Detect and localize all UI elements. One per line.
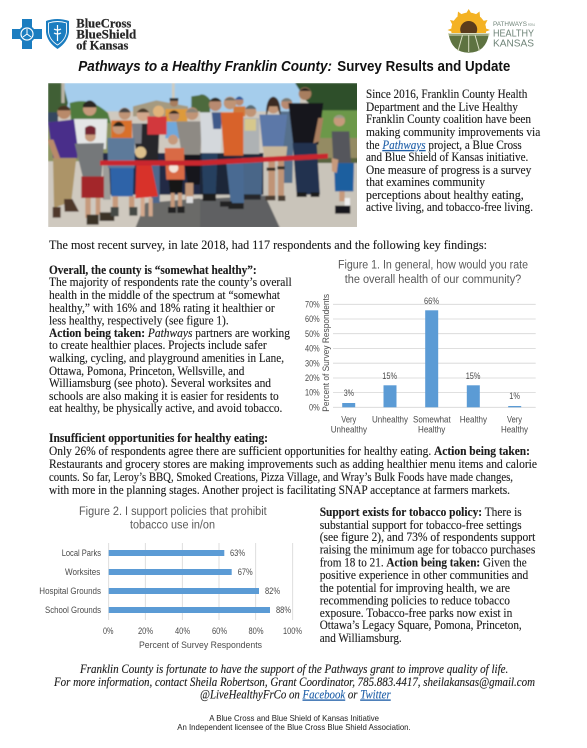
chart: figure 2 tobacco policy support <box>39 506 302 650</box>
text block: healthy eating finding: Only 26% of respondents agree there are sufficient opportunities for healthy eating. Action being taken: <box>49 444 530 458</box>
text block: introduction: Since 2016, Franklin County Health <box>366 87 527 101</box>
y axis labels: 20% <box>305 373 320 383</box>
y axis labels: 0% <box>309 402 320 412</box>
icon: blue cross <box>12 19 42 49</box>
text block: introduction: that examines community <box>366 175 486 189</box>
text block: closing and contact information: Franklin County is fortunate to have the support of the Pathways grant to improve quality of life. <box>79 662 508 676</box>
text block: overall health finding: health in the middle of the spectrum at “somewhat <box>49 288 281 302</box>
category labels <box>39 548 102 615</box>
text block: overall health finding: The majority of respondents rate the county’s overall <box>49 275 292 289</box>
photo: red ribbon <box>100 154 328 166</box>
chart title: tobacco use in/on <box>130 520 215 532</box>
logo wordmark: FOR A <box>528 23 535 27</box>
data labels <box>344 296 520 401</box>
y axis labels: Percent of Survey Respondents <box>321 293 331 412</box>
category labels: Healthy <box>501 424 529 434</box>
x axis labels: 0% <box>103 626 114 636</box>
bars <box>109 550 270 613</box>
logo wordmark: BlueShield <box>76 28 136 42</box>
data labels: 63% <box>230 548 245 558</box>
category labels: Unhealthy <box>372 414 409 424</box>
data labels: 82% <box>265 586 280 596</box>
icon: blue shield <box>46 19 69 49</box>
text block: overall health finding: eat healthy, be physically active, and avoid tobacco. <box>49 401 282 415</box>
y axis labels: 50% <box>305 329 320 339</box>
category labels: Somewhat <box>413 414 451 424</box>
category labels: Healthy <box>460 414 488 424</box>
chart title: Figure 1. In general, how would you rate <box>338 260 528 272</box>
text block: healthy eating finding: Restaurants and grocery stores are making improvements such as adding healthier menu items and calorie <box>49 457 537 471</box>
text block: introduction: the Pathways project, a Blue Cross <box>366 138 522 152</box>
photo: ribbon cutting group <box>47 83 360 228</box>
x axis labels <box>103 626 302 650</box>
category labels: Unhealthy <box>331 424 368 434</box>
data labels: 88% <box>276 605 291 615</box>
text block: introduction: Franklin County coalition have been <box>366 112 531 126</box>
logo wordmark: of Kansas <box>76 38 128 52</box>
y axis labels: 30% <box>305 358 320 368</box>
logo: Blue Cross Blue Shield of Kansas <box>12 16 136 52</box>
text: survey summary sentence: The most recent survey, in late 2018, had 117 respondents and the following key findings: <box>49 238 487 252</box>
y axis labels: 70% <box>305 300 320 310</box>
text block: tobacco policy finding: positive experience in other communities and <box>320 568 528 582</box>
text block: healthy eating finding: Insufficient opportunities for healthy eating: <box>49 431 268 445</box>
text block: closing and contact information: @LiveHealthyFrCo on Facebook or Twitter <box>200 688 391 702</box>
category labels <box>331 414 529 434</box>
logo wordmark: BlueCross <box>76 16 131 30</box>
text block: healthy eating finding: counts. So far, Leroy’s BBQ, Smoked Creations, Pizza Village, and Wray’s Bulk Foods have made changes, <box>49 470 513 484</box>
footer: licensee notice: A Blue Cross and Blue Shield of Kansas Initiative <box>209 713 379 723</box>
text block: introduction: Department and the Live Healthy <box>366 100 519 114</box>
text block: overall health finding: Williamsburg (see photo). Several worksites and <box>49 376 271 390</box>
chart title: Figure 2. I support policies that prohibit <box>79 506 267 518</box>
text block: overall health finding: Overall, the county is “somewhat healthy”: <box>49 263 257 277</box>
data labels: 15% <box>382 371 397 381</box>
y axis labels: 10% <box>305 388 320 398</box>
category labels: School Grounds <box>45 605 102 615</box>
text block: tobacco policy finding: Support exists for tobacco policy: There is <box>320 505 522 519</box>
text block: overall health finding: healthy,” with 16% and 18% rating it healthier or <box>49 301 275 315</box>
text block: overall health finding: walking, cycling, and playground amenities in Lane, <box>49 351 284 365</box>
text block: introduction: active living, and tobacco-free living. <box>366 200 533 214</box>
title: subtitle part: Survey Results and Update <box>337 59 510 75</box>
x axis labels: 80% <box>248 626 264 636</box>
text block: tobacco policy finding: exposure. Tobacco-free parks now exist in <box>320 606 512 620</box>
footer: licensee notice: An Independent licensee of the Blue Cross Blue Shield Association. <box>177 722 411 732</box>
text block: introduction: and Blue Shield of Kansas initiative. <box>366 150 528 164</box>
chart: figure 1 overall health ratings <box>305 260 536 434</box>
title: Pathways to a Healthy Franklin County: <box>78 59 332 75</box>
text block: introduction <box>366 87 541 214</box>
text block: overall health finding <box>49 263 292 415</box>
x axis labels: Percent of Survey Respondents <box>139 640 263 650</box>
logo wordmark: PATHWAYS <box>493 21 528 28</box>
text block: introduction: perceptions about healthy eating, <box>366 188 524 202</box>
photo left half <box>47 83 203 228</box>
category labels: Healthy <box>418 424 446 434</box>
text block: closing and contact information: For more information, contact Sheila Robertson, Grant Coordinator, 785.883.4417, sheilakansas@gmail.com <box>53 675 535 689</box>
data labels: 15% <box>466 371 481 381</box>
text block: overall health finding: less healthy, respectively (see figure 1). <box>49 314 229 328</box>
y axis labels: 40% <box>305 344 320 354</box>
bars <box>342 310 521 407</box>
y axis labels <box>305 293 331 412</box>
category labels: Worksites <box>65 567 101 577</box>
chart title <box>79 506 267 532</box>
logo wordmark <box>76 16 136 52</box>
text block: overall health finding: schools are also making it is easier for residents to <box>49 389 279 403</box>
text block: overall health finding: Action being taken: Pathways partners are working <box>49 326 290 340</box>
chart title: the overall health of our community? <box>345 274 521 286</box>
text block: tobacco policy finding: recommending policies to reduce tobacco <box>320 594 510 608</box>
photo right half <box>200 83 360 228</box>
x axis labels: 60% <box>212 626 227 636</box>
category labels: Very <box>507 414 523 424</box>
data labels <box>230 548 291 615</box>
text block: tobacco policy finding: raising the minimum age for tobacco purchases <box>320 542 536 556</box>
text block: overall health finding: to create healthier places. Projects include safer <box>49 338 267 352</box>
text block: tobacco policy finding: Ottawa’s Legacy Square, Pomona, Princeton, <box>320 618 522 632</box>
text block: healthy eating finding <box>49 431 537 497</box>
text block: tobacco policy finding <box>320 505 536 645</box>
x axis labels: 100% <box>283 626 302 636</box>
footer: licensee notice <box>177 713 411 732</box>
text block: tobacco policy finding: and Williamsburg. <box>320 631 402 645</box>
category labels: Hospital Grounds <box>39 586 102 596</box>
chart title <box>338 260 528 286</box>
text block: tobacco policy finding: substantial support for tobacco-free settings <box>320 518 522 532</box>
icon: sunflower over field <box>448 9 490 53</box>
text block: introduction: making community improvements via <box>366 125 541 139</box>
y axis labels: 60% <box>305 314 320 324</box>
data labels: 67% <box>238 567 253 577</box>
logo wordmark: HEALTHY <box>493 28 534 40</box>
data labels: 1% <box>509 391 520 401</box>
category labels: Local Parks <box>62 548 102 558</box>
text block: tobacco policy finding: (see figure 2), and 73% of respondents support <box>320 530 536 544</box>
text block: tobacco policy finding: from 18 to 21. Action being taken: Given the <box>320 556 527 570</box>
logo wordmark <box>493 21 535 50</box>
category labels: Very <box>341 414 357 424</box>
logo wordmark: KANSAS <box>493 38 534 50</box>
data labels: 3% <box>344 388 354 398</box>
text block: tobacco policy finding: the potential for improving health, we are <box>320 581 510 595</box>
text block: introduction: One measure of progress is a survey <box>366 163 532 177</box>
x axis labels: 40% <box>175 626 190 636</box>
text block: overall health finding: Ottawa, Pomona, Princeton, Wellsville, and <box>49 364 244 378</box>
logo: Pathways to a Healthy Kansas <box>448 9 535 53</box>
x axis labels: 20% <box>138 626 153 636</box>
data labels: 66% <box>424 296 439 306</box>
text block: healthy eating finding: with more in the planning stages. Another project is facilitating SNAP acceptance at farmers markets. <box>49 483 510 497</box>
text block: closing and contact information <box>53 662 535 702</box>
